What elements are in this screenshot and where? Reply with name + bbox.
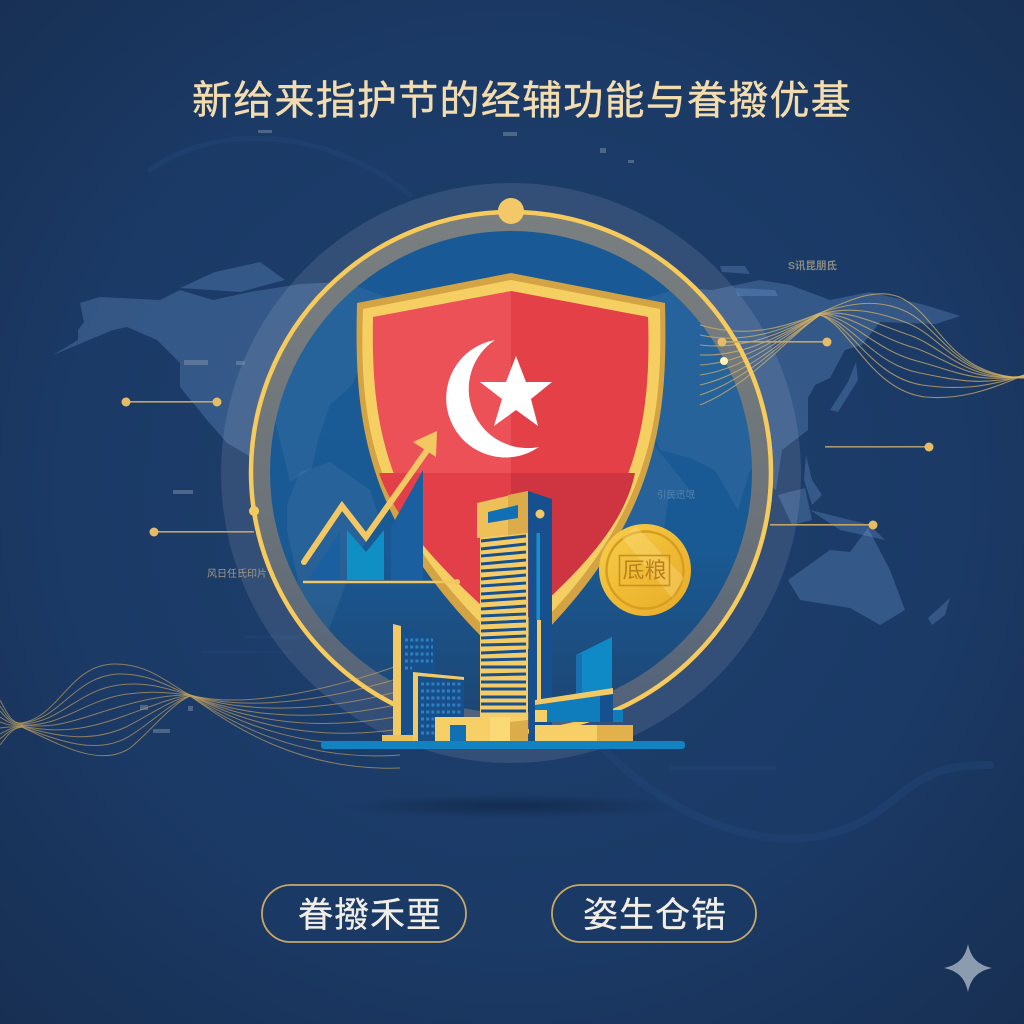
building right xyxy=(535,637,633,741)
connector: lower left xyxy=(150,528,254,536)
grey ring band xyxy=(250,211,772,733)
dash marks xyxy=(140,130,634,733)
background swoosh arcs xyxy=(150,138,990,839)
world map outside disc xyxy=(53,262,960,625)
shield red xyxy=(373,291,648,632)
chart baseline arrow dot xyxy=(454,579,460,585)
shield right half xyxy=(511,291,648,632)
tower gold strip xyxy=(537,620,541,700)
outer translucent halo ring xyxy=(221,183,801,763)
chart light bar xyxy=(347,530,384,580)
tower dot xyxy=(536,510,544,518)
tower podium xyxy=(435,717,528,741)
shield gold band xyxy=(362,280,660,652)
icon: sparkle xyxy=(944,944,992,992)
map: eurasia xyxy=(640,280,960,510)
shield lower shade xyxy=(379,473,511,632)
tower crown window xyxy=(488,505,518,523)
tower side xyxy=(528,491,552,741)
city skyline xyxy=(382,491,633,741)
ground shadow xyxy=(340,794,680,818)
tower body xyxy=(480,533,528,719)
map: philippines and indonesia xyxy=(778,455,885,540)
coin xyxy=(599,524,691,616)
map: tasmania xyxy=(928,598,950,625)
wave lines left xyxy=(0,664,400,768)
coin: 厎粮 xyxy=(622,558,667,583)
tower crown shade xyxy=(508,491,528,535)
chart arrow head xyxy=(413,431,437,457)
ground bar xyxy=(321,741,685,749)
building left tall xyxy=(382,624,435,741)
main tower xyxy=(477,491,552,741)
button: left xyxy=(262,885,466,942)
button: left: 眷撥禾垔 xyxy=(298,896,442,935)
ring top node xyxy=(498,198,524,224)
crescent xyxy=(446,340,539,457)
world map inside disc xyxy=(276,286,752,630)
map: australia xyxy=(788,528,905,625)
label: shield right: 引民迅氓 xyxy=(657,489,696,501)
map: arctic islands xyxy=(180,262,778,296)
building left short xyxy=(413,672,464,741)
star xyxy=(480,356,552,426)
inner blue disc xyxy=(270,231,752,713)
growth chart xyxy=(303,431,460,585)
chart baseline xyxy=(303,581,455,583)
connector lines with dots xyxy=(122,338,934,536)
shield rim xyxy=(357,273,665,665)
map: north america xyxy=(53,282,400,482)
connector: middle right xyxy=(825,442,934,452)
shield xyxy=(357,273,665,665)
label: top right: S讯昆朋氐 xyxy=(788,259,838,272)
small faint labels and dashes xyxy=(140,130,838,733)
tower strip xyxy=(536,533,540,620)
connector: upper left xyxy=(122,398,222,406)
chart trend line xyxy=(304,449,428,562)
gold ring xyxy=(251,212,771,732)
glow dot xyxy=(720,357,728,365)
shield lower right shade xyxy=(511,473,635,632)
button: right xyxy=(552,885,756,942)
tower crown xyxy=(477,491,528,538)
connector: upper right xyxy=(718,338,832,346)
title: 新给来指护节的经辅功能与眷撥优基 xyxy=(192,79,852,123)
connector: lower right xyxy=(770,520,878,530)
label: left: 风日任氏印片 xyxy=(207,567,267,580)
wave lines right xyxy=(700,294,1024,405)
map: japan xyxy=(830,362,858,412)
chart dark bars xyxy=(308,470,423,580)
button: right: 姿生仓锆 xyxy=(583,896,727,935)
ring left node xyxy=(249,506,259,516)
tower stripes xyxy=(481,536,526,711)
